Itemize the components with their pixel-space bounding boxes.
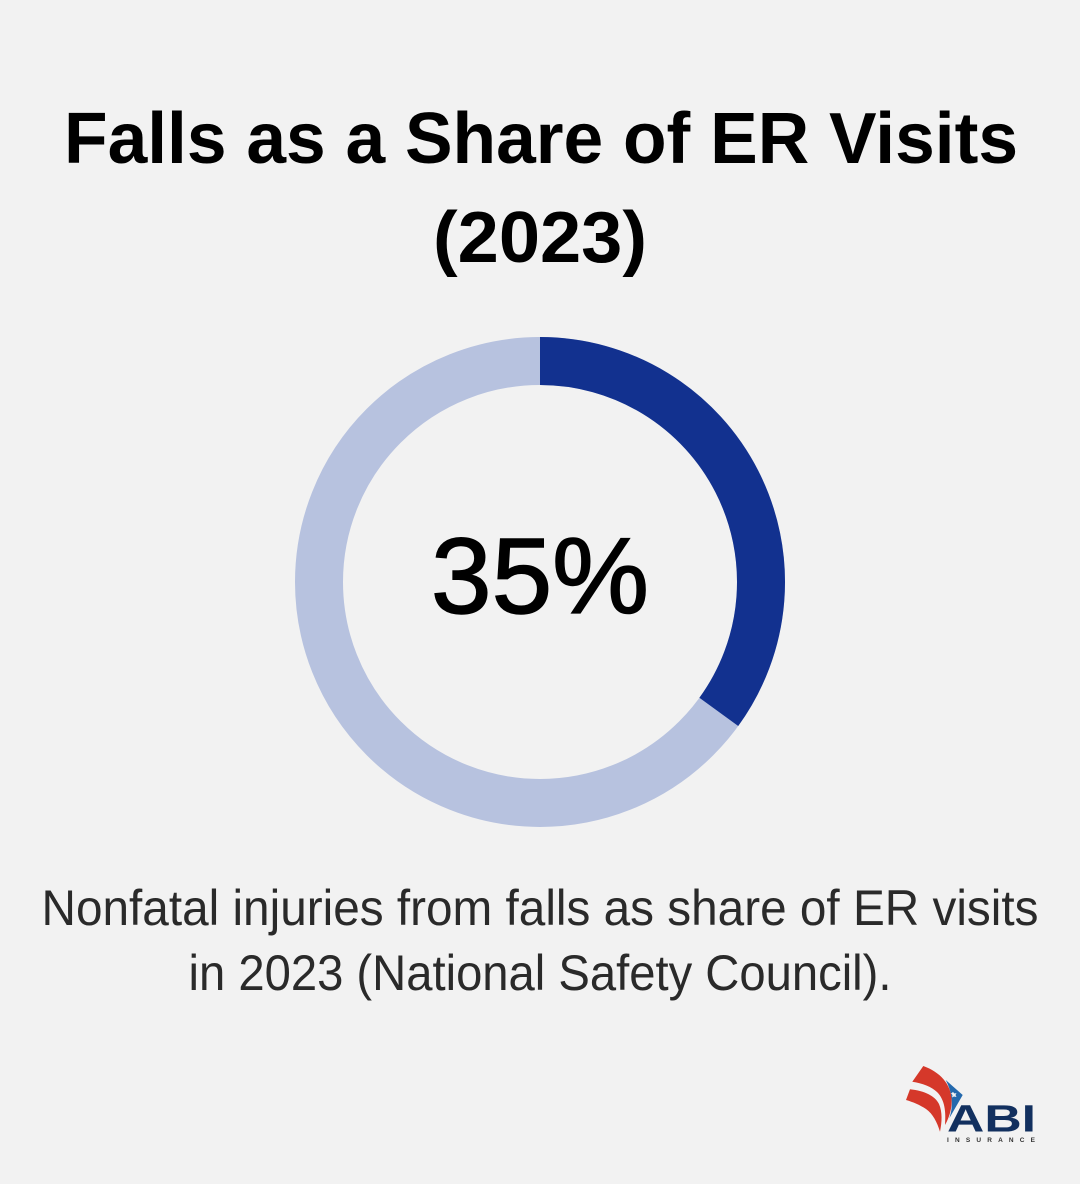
logo: ABI Insurance [906, 1066, 1036, 1144]
description text [42, 880, 1038, 1001]
donut value: 35% [431, 515, 649, 636]
title: (2023) [433, 198, 647, 278]
logo: ABI Insurance: ABI [947, 1099, 1036, 1141]
description text: in 2023 (National Safety Council). [188, 945, 892, 1001]
description text: Nonfatal injuries from falls as share of ER visits [42, 880, 1038, 936]
logo: ABI Insurance: INSURANCE [947, 1137, 1036, 1144]
title: Falls as a Share of ER Visits [64, 99, 1018, 179]
donut chart: 35% [319, 361, 761, 803]
title [64, 99, 1018, 278]
